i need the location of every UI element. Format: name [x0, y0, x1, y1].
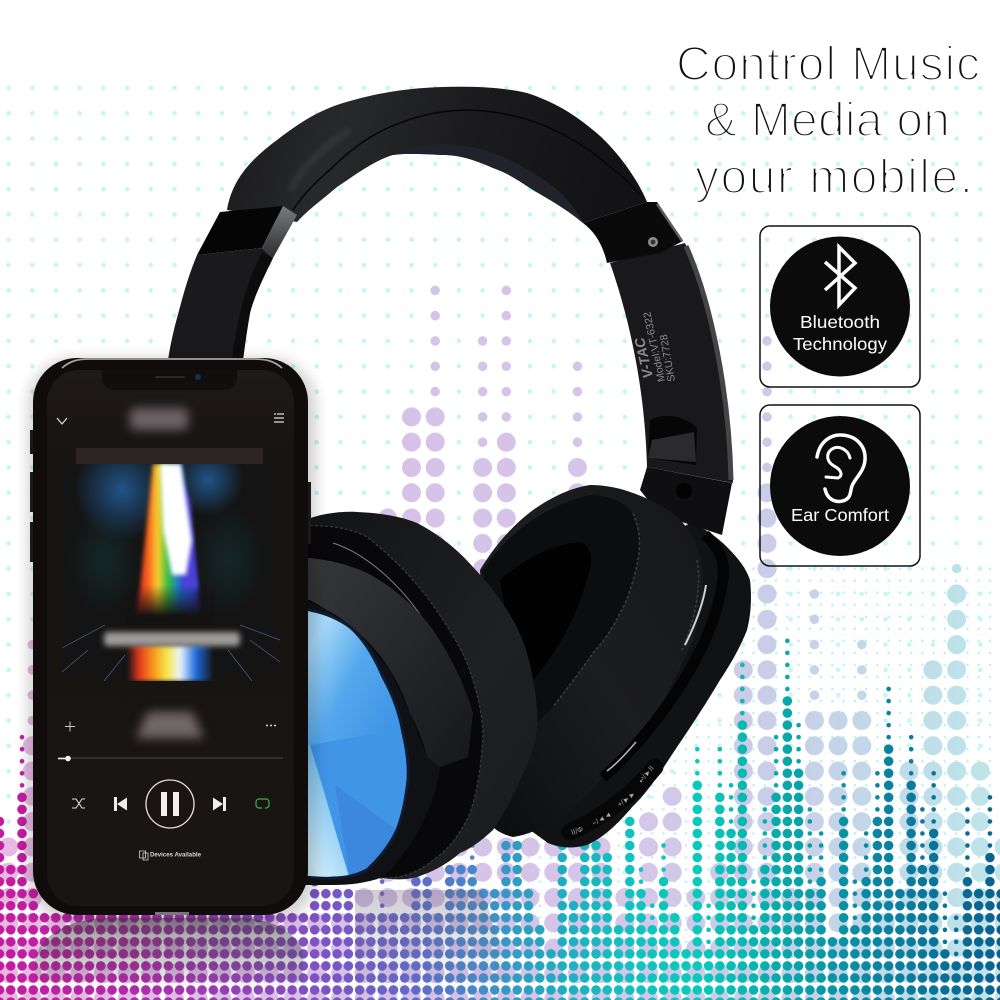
devices available label — [140, 851, 201, 860]
badge: Bluetooth Technology — [760, 226, 920, 387]
right ear pad opening — [482, 495, 640, 725]
control buttons on right cup: ↩/►II — [636, 764, 656, 785]
repeat icon — [256, 799, 269, 808]
side buttons — [30, 430, 311, 562]
more dots icon — [266, 724, 276, 726]
title: Control Music — [676, 38, 980, 91]
pad stitching — [553, 513, 699, 707]
blue plate rim — [305, 608, 408, 878]
left band hinge and slider — [168, 206, 297, 360]
front cup housing — [305, 600, 440, 885]
front cup arm — [305, 558, 473, 767]
blue metallic plate — [308, 610, 408, 877]
plus icon — [65, 722, 75, 732]
front ear pad — [305, 512, 537, 879]
model label text on band: Model:VT-6322 — [641, 311, 668, 383]
notch — [102, 370, 237, 390]
bluetooth label — [793, 312, 887, 354]
bluetooth label: Technology — [793, 334, 887, 354]
bluetooth label: Bluetooth — [800, 312, 880, 332]
previous icon — [114, 797, 127, 811]
headphones — [168, 87, 751, 900]
queue icon — [274, 414, 284, 422]
model label text on band: V-TAC — [631, 335, 656, 380]
chevron icon — [57, 418, 67, 424]
control buttons on right cup: +/►► — [615, 789, 638, 809]
blurred playlist title — [130, 408, 188, 430]
control buttons on right cup: −/◄◄ — [590, 810, 613, 828]
phone soft shadow — [28, 358, 316, 922]
ear comfort label: Ear Comfort — [791, 505, 889, 525]
right ear pad — [480, 485, 703, 837]
shuffle icon — [72, 799, 85, 808]
right ear cup shell — [530, 523, 751, 847]
headband padding — [227, 87, 647, 223]
yoke — [640, 467, 732, 535]
title: your mobile. — [695, 151, 973, 204]
phone body — [33, 358, 308, 915]
album art — [62, 464, 280, 681]
glossy ring on right cup — [603, 535, 723, 778]
icon: ear — [817, 435, 865, 501]
title — [676, 38, 980, 204]
title: & Media on — [705, 94, 950, 147]
pause button — [146, 780, 194, 828]
blurred track name — [136, 712, 204, 738]
blurred album text — [104, 632, 240, 646]
charging port glint — [155, 912, 189, 915]
icon: bluetooth — [825, 247, 855, 305]
progress bar — [58, 756, 283, 761]
right hinge with screw — [583, 202, 683, 263]
album strip — [76, 448, 263, 464]
screen — [47, 370, 294, 906]
front pad inner rim — [305, 526, 483, 878]
reflection under phone and headphones — [35, 890, 505, 1000]
model label text on band: SKU:7728 — [658, 333, 678, 383]
badge: Ear Comfort — [760, 405, 920, 566]
smartphone — [30, 358, 311, 915]
control buttons on right cup: II/Φ — [570, 824, 584, 837]
right band slider — [610, 243, 733, 483]
model label text on band — [631, 311, 678, 383]
devices available label: Devices Available — [150, 852, 201, 858]
speaker and camera — [155, 374, 201, 380]
next icon — [213, 797, 226, 811]
control buttons on right cup — [570, 764, 656, 837]
